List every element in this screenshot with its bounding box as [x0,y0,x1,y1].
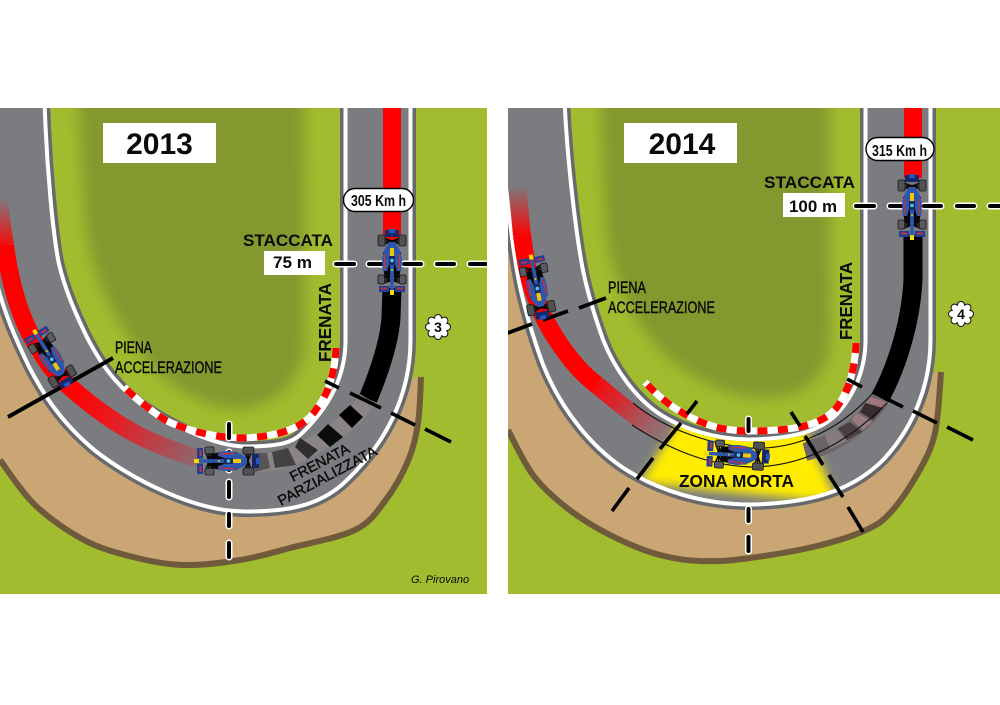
black braking line 2014 [805,235,913,455]
dashed line: end of full braking 2013 [325,381,451,442]
speed pill 315 km/h: 315 Km h [872,143,927,160]
dashed line: apex 2014 [745,419,752,551]
label: piena accelerazione 2014: PIENA [608,279,646,297]
black braking line 2013 [255,288,392,472]
car on exit 2014 [518,254,556,320]
label: piena accelerazione 2014 [608,279,715,317]
dashed line: staccata 2014 [856,202,1000,210]
red acceleration line 2014 [517,108,913,436]
car on straight 2013 [378,229,406,295]
label: staccata 75 m [243,232,333,275]
label: staccata 100 m [764,174,855,217]
label: piena accelerazione 2013 [114,341,222,374]
title 2014: 2014 [649,128,716,161]
panel: 2014 [508,108,1000,594]
icon: turn number 3: 3 [434,319,442,335]
thin lines of unused line through dead zone [632,393,887,467]
dashed line: end of full braking 2014 [847,379,973,440]
dashed line: apex 2013 [226,424,232,557]
track 2014 [532,100,898,472]
speed pill 305 km/h [344,188,414,212]
label: staccata 100 m: 100 m [789,197,837,216]
label: frenata parzializzata: FRENATA [287,441,353,486]
dashed line: staccata 2013 [336,260,490,268]
track 2013 [12,100,378,479]
car at apex 2013 [194,447,260,475]
speed pill 315 km/h [866,138,934,160]
label: staccata 75 m: 75 m [273,253,312,272]
gravel trap 2013 [0,280,421,565]
label: frenata 2014: FRENATA [836,262,856,340]
cut line: piena accelerazione 2013 [8,358,113,417]
label: piena accelerazione 2014: ACCELERAZIONE [608,299,715,317]
panel: 2013 [0,108,487,594]
icon: turn number 3 [425,314,451,340]
red and white kerb 2014 [645,343,856,431]
infographic: braking comparison 2013 vs 2014 [0,108,1000,594]
credit: G. Pirovano [411,574,469,586]
yellow dead zone [640,415,838,503]
red and white kerb 2013 [124,348,336,438]
gravel trap 2014 [508,249,944,564]
label: zona morta: ZONA MORTA [679,471,794,491]
cut line: piena accelerazione 2014 [505,298,606,334]
label: frenata 2013: FRENATA [315,283,335,362]
title 2014 [624,123,737,163]
car in dead zone 2014 [703,439,771,471]
car on exit 2013 [24,326,77,389]
dashed line: dead zone end [791,412,863,532]
red acceleration line 2013 [0,108,392,458]
label: staccata 75 m: STACCATA [243,232,333,250]
car on straight 2014 [898,174,926,240]
speed pill 305 km/h: 305 Km h [351,193,406,210]
label: piena accelerazione 2013: ACCELERAZIONE [115,359,222,377]
title 2013 [103,123,216,163]
dashed line: dead zone start [612,401,697,511]
label: staccata 100 m: STACCATA [764,174,855,192]
title 2013: 2013 [126,128,193,161]
label: piena accelerazione 2013: PIENA [115,339,152,357]
icon: turn number 4: 4 [957,306,965,322]
icon: turn number 4 [948,301,974,327]
label: frenata parzializzata: PARZIALIZZATA [275,444,380,510]
